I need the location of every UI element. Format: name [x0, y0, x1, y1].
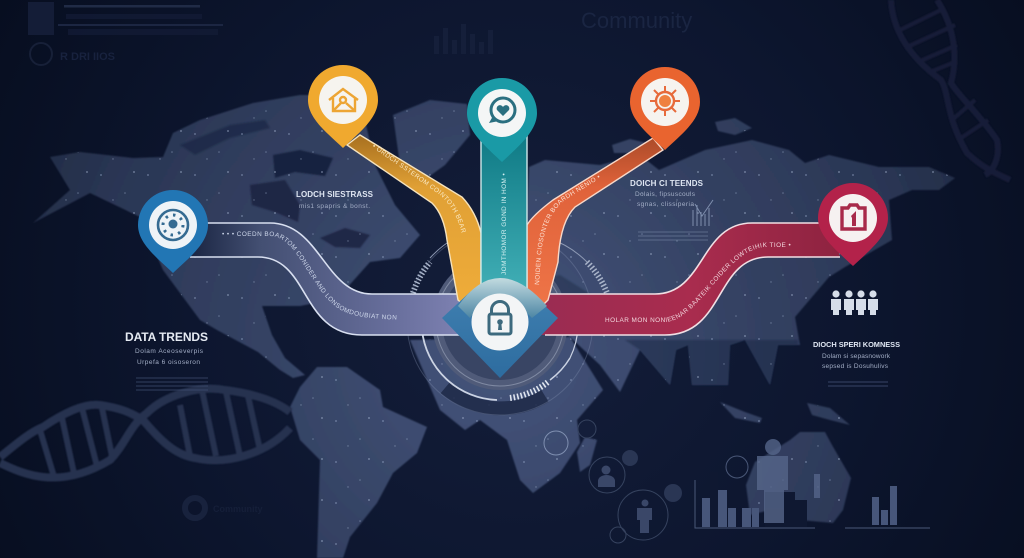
water: Canadian inland dark	[250, 180, 300, 222]
faint logo text: bottom left	[185, 498, 262, 518]
DNA helix: top right	[891, 0, 1010, 180]
faint top bar chart	[434, 24, 493, 54]
top-left faint legend	[28, 2, 223, 65]
pin: crimson bag	[818, 183, 888, 266]
central hub with lock	[442, 278, 558, 378]
faint bar chart with person: bottom right	[695, 439, 930, 528]
icon: padlock	[489, 302, 511, 334]
label: DATA TRENDS	[125, 330, 208, 390]
pin: blue wheel	[138, 190, 208, 273]
icon: wheel	[158, 210, 188, 240]
world map	[33, 95, 955, 558]
label: DATA TRENDS: DATA TRENDS	[125, 330, 208, 344]
label: DIOCH SPERI KOMNESS	[813, 340, 900, 386]
ribbon: teal: JOMTHOMOR GOND IN HOM • •	[502, 174, 506, 275]
concentric target rings	[407, 229, 607, 415]
people icons	[831, 290, 878, 315]
faint network of people circles	[544, 420, 682, 543]
label: LODCH SIESTRASS: mis1 spapris & bonst.	[299, 203, 370, 210]
water: Mediterranean	[527, 275, 600, 322]
label: DOICH CI TEENDS: DOICH CI TEENDS	[630, 179, 704, 188]
Community faint heading: Community	[581, 8, 692, 33]
light bars	[702, 486, 897, 527]
water: South Asia shade	[625, 340, 798, 385]
ribbon: blue data trends: • • • COEDN BOARTOM CONIDER AND LONSOMDOUBIAT NON	[222, 232, 396, 320]
icon: speech bubble	[489, 98, 515, 123]
label: LODCH SIESTRASS: LODCH SIESTRASS	[296, 190, 374, 199]
top-left faint legend: R DRI IIOS	[60, 51, 115, 63]
label: DIOCH SPERI KOMNESS: Dolam si sepasnowork	[822, 353, 891, 360]
icon: sun gear	[650, 86, 680, 116]
star dots on land	[33, 95, 955, 558]
icon: house	[329, 89, 358, 111]
water: St Lawrence	[320, 228, 370, 248]
label: DOICH CI TEENDS	[630, 179, 713, 240]
label: DIOCH SPERI KOMNESS: DIOCH SPERI KOMNESS	[813, 340, 900, 349]
pin: yellow house	[308, 65, 378, 148]
DNA helix: bottom left	[0, 389, 290, 480]
faint logo text: bottom left: Community	[213, 504, 262, 514]
large figure	[757, 439, 820, 523]
water: Arctic channels	[180, 120, 270, 155]
pin: orange gear	[630, 67, 700, 150]
ribbon: teal	[480, 136, 528, 288]
label: DIOCH SPERI KOMNESS: sepsed is Dosuhulivs	[822, 363, 889, 370]
ribbon: red: HOLAR MON NONIEENAR BAATEIK COIDER LOWTEIHIK TIOE •	[606, 242, 790, 322]
icon: lock case	[842, 205, 865, 229]
hub: dome	[458, 278, 547, 318]
mini chart	[638, 200, 713, 240]
ribbon: orange	[528, 138, 664, 304]
ribbon: red	[542, 222, 840, 336]
label: DOICH CI TEENDS: sgnas, clissiperia	[637, 201, 694, 208]
pin: teal speech bubble	[467, 78, 537, 162]
label: DATA TRENDS: Urpefa 6 oisoseron	[137, 359, 200, 366]
ribbon: orange: NOIDEN CIOSONTER BOARDH NENIO •	[534, 176, 600, 284]
ribbon: yellow: • ORDCH SSTEROM COINTOTH BEAR	[373, 145, 466, 233]
label: LODCH SIESTRASS	[296, 190, 374, 210]
water: Hudson Bay	[273, 150, 333, 178]
label: DATA TRENDS: Dolam Aceoseverpis	[135, 348, 204, 355]
hub: white circle	[472, 294, 528, 350]
ribbon: yellow	[346, 134, 480, 302]
hub: diamond	[442, 292, 558, 378]
dark water features	[180, 120, 798, 385]
dark bars	[710, 472, 807, 527]
label: DOICH CI TEENDS: Dolais, fipsuscouls	[635, 191, 696, 198]
ribbon: blue data trends	[190, 222, 460, 336]
